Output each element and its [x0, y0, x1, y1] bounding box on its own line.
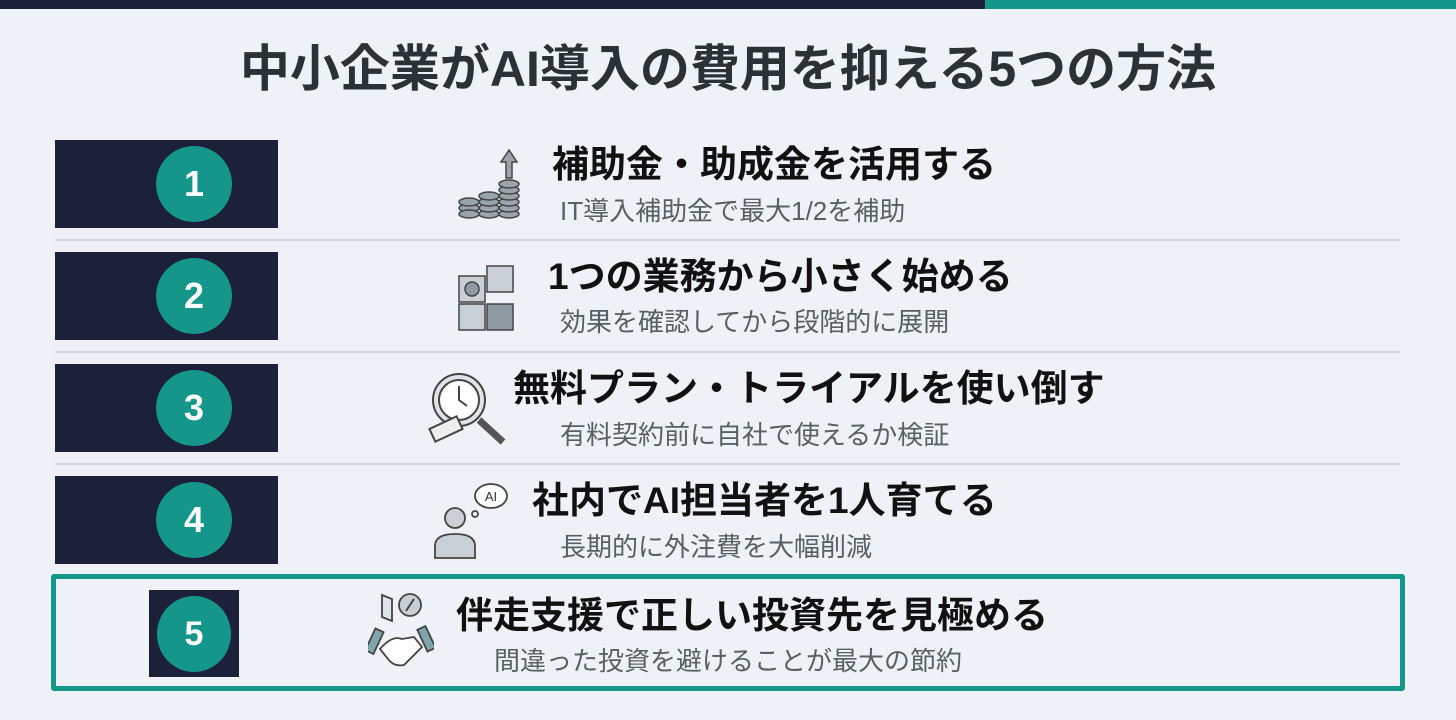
number badge 2: 2 [184, 275, 204, 316]
icon: coins [458, 148, 520, 219]
title: 中小企業がAI導入の費用を抑える5つの方法 [240, 41, 1216, 97]
top bar [0, 0, 1456, 9]
subtext 3: 有料契約前に自社で使えるか検証 [560, 420, 949, 450]
heading 3: 無料プラン・トライアルを使い倒す [513, 368, 1105, 409]
row 2 [55, 252, 1013, 340]
number badge 3: 3 [184, 387, 204, 428]
subtext 5: 間違った投資を避けることが最大の節約 [494, 646, 962, 676]
row 1 [55, 140, 996, 228]
number badge 5: 5 [185, 614, 203, 652]
number badge 4: 4 [184, 499, 204, 540]
icon: handshake compass [368, 593, 434, 666]
heading 2: 1つの業務から小さく始める [548, 256, 1013, 297]
subtext 1: IT導入補助金で最大1/2を補助 [560, 196, 905, 226]
number badge 1: 1 [184, 163, 204, 204]
icon: clock magnifier [428, 373, 506, 445]
heading 5: 伴走支援で正しい投資先を見極める [456, 595, 1048, 636]
number badge 3 [55, 364, 278, 452]
icon: person AI [434, 483, 508, 559]
number badge 5 [149, 590, 239, 677]
subtext 2: 効果を確認してから段階的に展開 [560, 307, 949, 337]
row 4 [55, 476, 997, 564]
subtext 4: 長期的に外注費を大幅削減 [560, 532, 872, 562]
row 5 highlighted [51, 574, 1405, 691]
number badge 2 [55, 252, 278, 340]
icon: puzzle [458, 265, 514, 331]
number badge 4 [55, 476, 278, 564]
row 3 [55, 364, 1105, 452]
heading 1: 補助金・助成金を活用する [552, 144, 996, 185]
number badge 1 [55, 140, 278, 228]
heading 4: 社内でAI担当者を1人育てる [532, 480, 997, 521]
icon: person AI: AI [485, 489, 497, 504]
